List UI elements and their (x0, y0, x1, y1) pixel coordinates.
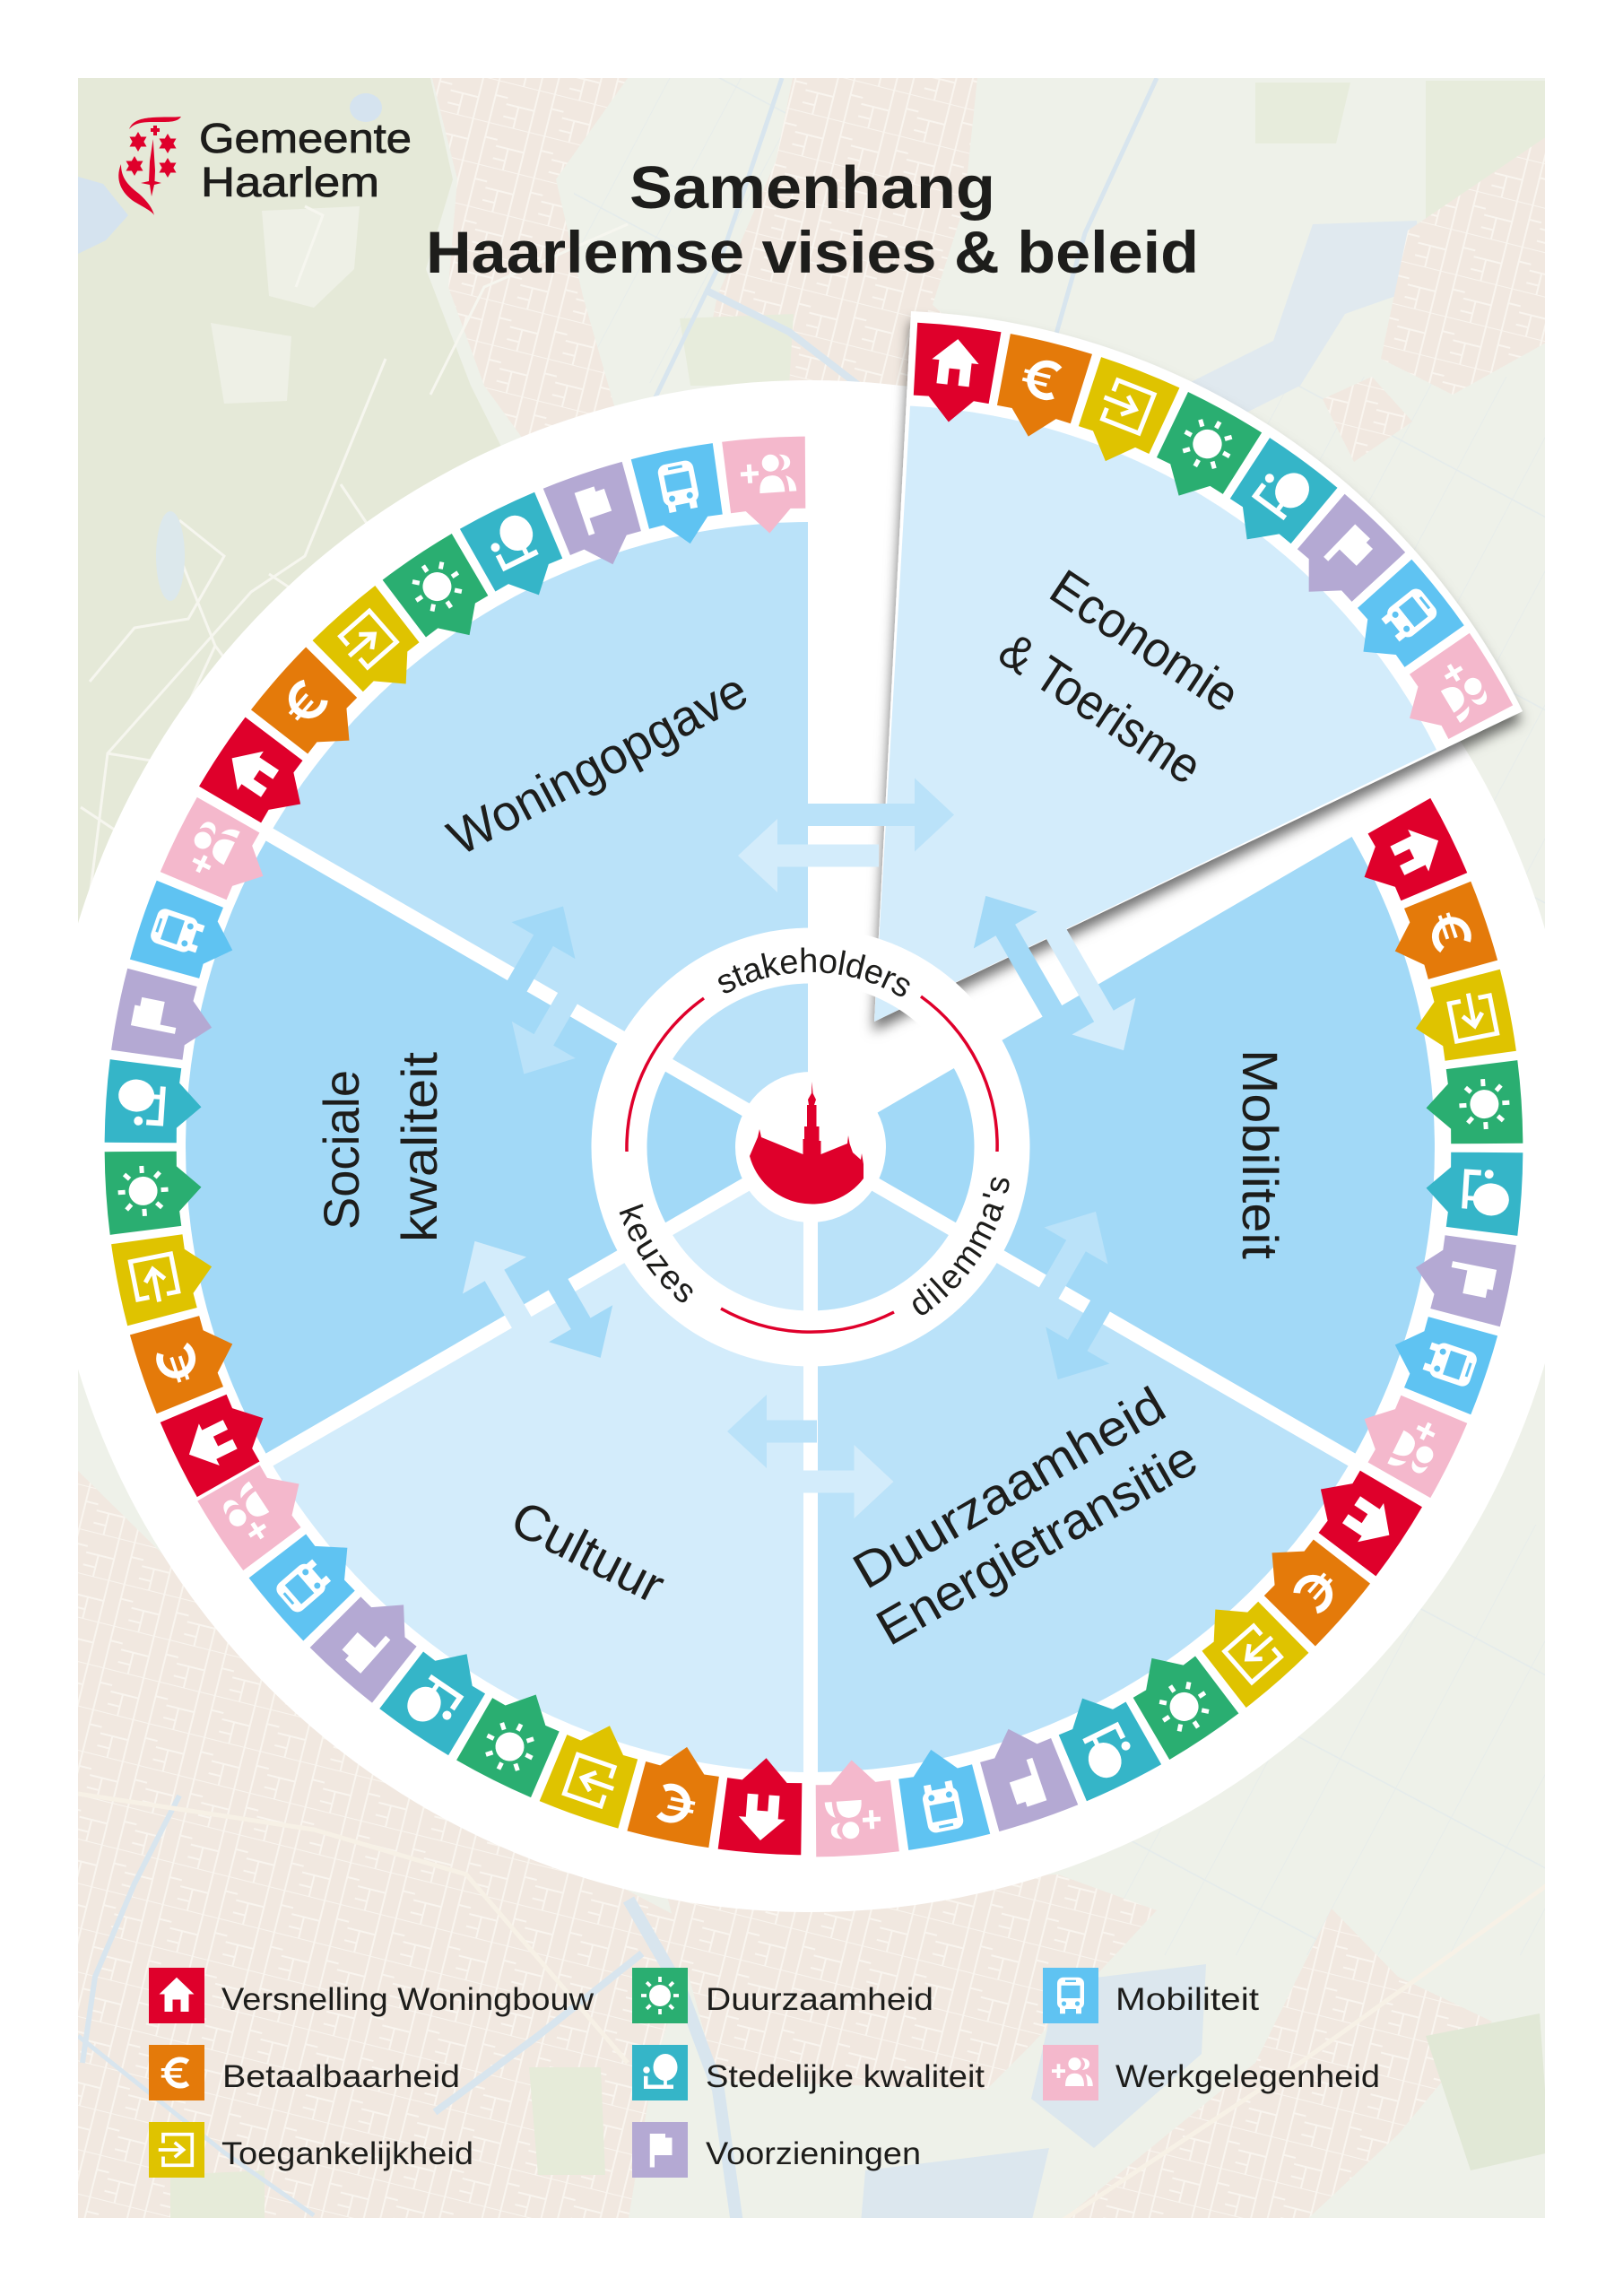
tile: Betaalbaarheid (129, 1305, 246, 1414)
tile: Toegankelijkheid (1066, 356, 1180, 476)
sector: Cultuur (269, 1147, 811, 1772)
tile: Mobiliteit (1382, 1306, 1498, 1415)
tiles: Duurzaamheid sector (810, 1455, 1423, 1858)
ring text: stakeholders: stakeholders (718, 947, 909, 996)
ring text: dilemma's: dilemma's (913, 1177, 1010, 1315)
legend: Stedelijke kwaliteit (632, 2045, 985, 2100)
hub with Haarlem skyline (735, 1072, 886, 1222)
logo Gemeente Haarlem (118, 115, 412, 215)
legend: Voorzieningen: Voorzieningen (706, 2136, 921, 2171)
tile: Betaalbaarheid (1245, 1521, 1371, 1647)
tile: Versnelling Woningbouw (160, 1380, 282, 1498)
sector: Woningopgave (269, 522, 808, 1147)
tile: Duurzaamheid (382, 533, 504, 658)
tile: Toegankelijkheid (312, 585, 438, 711)
tile: Voorzieningen (1408, 1227, 1517, 1327)
legend: Werkgelegenheid (1043, 2045, 1380, 2100)
tile: Stedelijke kwaliteit (103, 1059, 204, 1149)
legend: Duurzaamheid (632, 1968, 933, 2023)
centre hub ring (592, 927, 1029, 1367)
red arcs (627, 996, 997, 1332)
arrow: Duurzaamheid to Mobiliteit (999, 1193, 1128, 1342)
label: Cultuur: Cultuur (503, 1490, 673, 1613)
tile: Werkgelegenheid (1346, 1381, 1468, 1499)
tile: Toegankelijkheid (110, 1226, 220, 1326)
arrow: Mobiliteit to Economie (954, 877, 1085, 1031)
legend: Toegankelijkheid: Toegankelijkheid (221, 2136, 473, 2171)
arrow: Mobiliteit to Duurzaamheid (1026, 1263, 1147, 1398)
tile: Mobiliteit (890, 1742, 991, 1851)
label: Sociale: Sociale (313, 1070, 369, 1230)
arrow: Sociale to Woningopgave (474, 888, 595, 1023)
tile: Stedelijke kwaliteit (1213, 437, 1338, 564)
tile: Voorzieningen (110, 968, 220, 1068)
tile: Duurzaamheid (1117, 1635, 1239, 1761)
title: Samenhang (629, 154, 995, 222)
tile: Betaalbaarheid (627, 1739, 728, 1848)
label: Energietransitie: Energietransitie (867, 1430, 1206, 1656)
legend: Voorzieningen (632, 2122, 921, 2178)
label: Duurzaamheid: Duurzaamheid (843, 1376, 1175, 1599)
tiles: Economie sector (892, 321, 1531, 758)
arrow: Woningopgave to Economie (807, 778, 954, 852)
legend: Betaalbaarheid: Betaalbaarheid (222, 2059, 460, 2094)
logo text: Gemeente: Gemeente (199, 115, 412, 161)
label: Economie: Economie (1040, 558, 1250, 723)
arrow: Economie to Mobiliteit (1016, 900, 1156, 1069)
tile: Versnelling Woningbouw (718, 1755, 808, 1857)
label: Woningopgave: Woningopgave (438, 661, 757, 866)
tile: Stedelijke kwaliteit (1424, 1146, 1524, 1236)
tile: Toegankelijkheid (539, 1712, 649, 1830)
legend: Stedelijke kwaliteit: Stedelijke kwaliteit (706, 2059, 985, 2094)
tile: Werkgelegenheid (810, 1758, 899, 1858)
label: Mobiliteit: Mobiliteit (1232, 1049, 1289, 1259)
arrow: Woningopgave to Sociale (492, 944, 621, 1092)
wheel sectors (186, 522, 1435, 1776)
tile: Voorzieningen (969, 1716, 1079, 1832)
tile: Toegankelijkheid (1184, 1582, 1309, 1709)
tiles: Cultuur sector (194, 1448, 810, 1857)
tile: Duurzaamheid (1142, 391, 1263, 516)
tile: Voorzieningen (1279, 493, 1406, 621)
tile: Werkgelegenheid (722, 435, 812, 535)
tile: Betaalbaarheid (250, 647, 377, 772)
arrows between sectors (443, 778, 1156, 1518)
sector labels (313, 661, 1289, 1656)
tile: Werkgelegenheid (196, 1449, 322, 1571)
tile: Mobiliteit (129, 880, 246, 989)
tile: Stedelijke kwaliteit (459, 491, 577, 613)
tile: Duurzaamheid (103, 1145, 204, 1235)
sector: Sociale kwaliteit (186, 834, 811, 1460)
panel: exploded Economie & Toerisme sector (874, 311, 1531, 1022)
tile: Werkgelegenheid (160, 796, 282, 914)
arrow: Economie to Woningopgave (738, 819, 879, 892)
sector: Mobiliteit (811, 837, 1435, 1460)
tiles: Sociale kwaliteit sector (103, 796, 282, 1498)
arrow: Cultuur to Duurzaamheid (802, 1445, 893, 1518)
legend: Mobiliteit: Mobiliteit (1115, 1982, 1259, 2017)
label: kwaliteit: kwaliteit (391, 1052, 447, 1242)
legend: Mobiliteit (1043, 1968, 1259, 2023)
tile: Duurzaamheid (456, 1676, 573, 1798)
tile: Versnelling Woningbouw (1346, 797, 1468, 915)
logo text: Haarlem: Haarlem (201, 159, 379, 205)
icon: Grote Kerk silhouette (750, 1082, 864, 1205)
legend: Werkgelegenheid: Werkgelegenheid (1115, 2059, 1380, 2094)
legend: Betaalbaarheid (149, 2045, 460, 2100)
title line 2: Haarlemse visies & beleid (426, 219, 1199, 285)
legend (149, 1968, 1380, 2178)
title (426, 154, 1199, 285)
tile: Stedelijke kwaliteit (1045, 1680, 1162, 1802)
tile: Voorzieningen (542, 461, 652, 578)
tile: Mobiliteit (630, 442, 731, 552)
tile: Mobiliteit (1337, 559, 1465, 684)
tile: Betaalbaarheid (1382, 881, 1498, 990)
tiles: Woningopgave sector (198, 435, 812, 839)
tile: Versnelling Woningbouw (907, 321, 1002, 427)
tile: Versnelling Woningbouw (1298, 1455, 1423, 1577)
arrow: Duurzaamheid to Cultuur (727, 1395, 817, 1468)
icon: coat of arms (118, 117, 181, 215)
legend: Versnelling Woningbouw: Versnelling Woningbouw (221, 1982, 595, 2017)
legend: Toegankelijkheid (149, 2122, 473, 2178)
label: & Toerisme: & Toerisme (989, 621, 1212, 795)
legend: Versnelling Woningbouw (149, 1968, 595, 2023)
tile: Duurzaamheid (1424, 1060, 1524, 1150)
tile: Stedelijke kwaliteit (378, 1631, 501, 1756)
arrow: Sociale to Cultuur (513, 1243, 632, 1376)
white wheel background (45, 380, 1576, 1912)
tile: Versnelling Woningbouw (198, 717, 324, 839)
tiles: Mobiliteit sector (1346, 797, 1524, 1499)
tile: Werkgelegenheid (1388, 632, 1514, 754)
tile: Mobiliteit (248, 1517, 375, 1641)
arrow: Cultuur to Sociale (443, 1222, 562, 1356)
tile: Voorzieningen (309, 1578, 435, 1704)
ring text: keuzes: keuzes (619, 1204, 692, 1302)
legend: Duurzaamheid: Duurzaamheid (706, 1982, 933, 2017)
sector: Duurzaamheid (811, 1147, 1352, 1772)
tile: Betaalbaarheid (987, 333, 1092, 447)
tile: Toegankelijkheid (1408, 969, 1517, 1069)
